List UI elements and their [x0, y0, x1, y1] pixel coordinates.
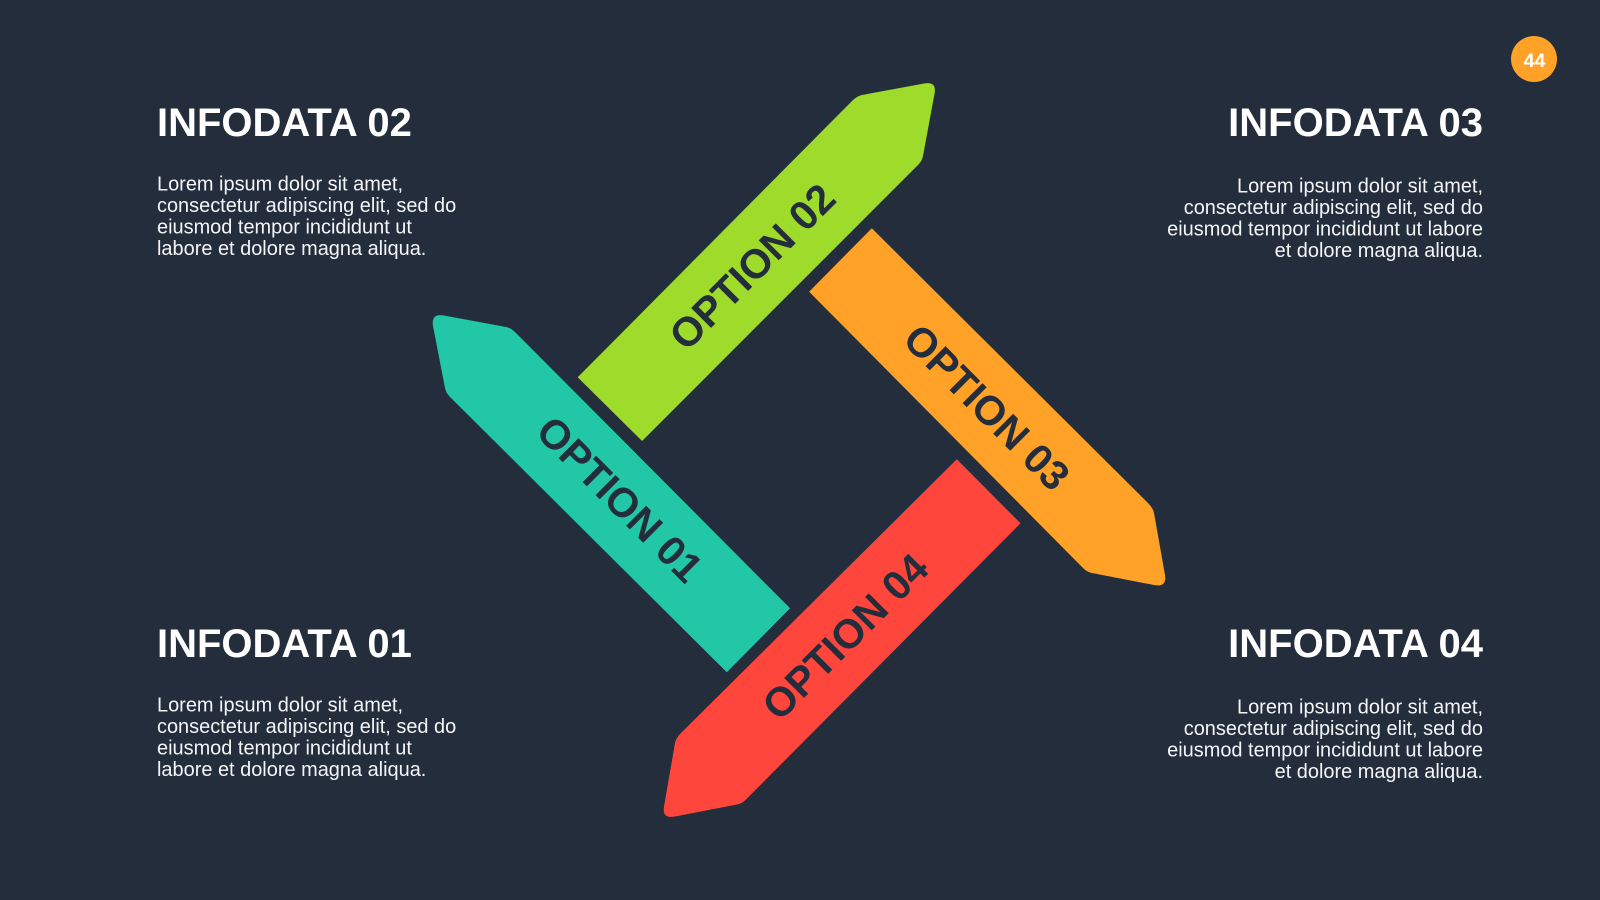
- text block: infodata 03: Lorem ipsum dolor sit amet,: [1237, 176, 1483, 198]
- text block: infodata 01: consectetur adipiscing elit, sed do: [157, 716, 456, 738]
- text block: infodata 01: eiusmod tempor incididunt ut: [157, 738, 412, 760]
- text block: infodata 04: INFODATA 04: [1228, 622, 1484, 666]
- text block: infodata 04: consectetur adipiscing elit, sed do: [1184, 718, 1483, 740]
- text block: infodata 03: eiusmod tempor incididunt ut labore: [1167, 218, 1483, 240]
- text block: infodata 02: labore et dolore magna aliqua.: [157, 238, 426, 260]
- arrow: option 01: [433, 315, 790, 672]
- arrow: option 04: [664, 459, 1020, 817]
- arrow: option 01: OPTION 01: [528, 407, 712, 591]
- text block: infodata 03: et dolore magna aliqua.: [1275, 240, 1483, 262]
- text block: infodata 02: [157, 101, 456, 260]
- text block: infodata 03: consectetur adipiscing elit, sed do: [1184, 197, 1483, 219]
- page number badge: 44: [1524, 50, 1545, 72]
- text block: infodata 02: consectetur adipiscing elit, sed do: [157, 195, 456, 217]
- text block: infodata 04: eiusmod tempor incididunt ut labore: [1167, 740, 1483, 762]
- text block: infodata 03: [1167, 101, 1483, 262]
- text block: infodata 04: [1167, 622, 1484, 783]
- page number badge: [1511, 36, 1557, 82]
- text block: infodata 02: eiusmod tempor incididunt ut: [157, 216, 412, 238]
- arrow: option 02: [578, 83, 935, 441]
- text block: infodata 02: INFODATA 02: [157, 101, 412, 145]
- text block: infodata 01: labore et dolore magna aliqua.: [157, 759, 426, 781]
- text block: infodata 01: [157, 622, 456, 781]
- text block: infodata 04: et dolore magna aliqua.: [1275, 761, 1483, 783]
- arrow: option 03: OPTION 03: [895, 315, 1079, 499]
- text block: infodata 02: Lorem ipsum dolor sit amet,: [157, 174, 403, 196]
- arrow: option 03: [809, 228, 1165, 585]
- text block: infodata 04: Lorem ipsum dolor sit amet,: [1237, 696, 1483, 718]
- arrow: option 02: OPTION 02: [660, 175, 844, 359]
- text block: infodata 01: Lorem ipsum dolor sit amet,: [157, 694, 403, 716]
- text block: infodata 03: INFODATA 03: [1228, 101, 1483, 145]
- text block: infodata 01: INFODATA 01: [157, 622, 412, 666]
- arrow: option 04: OPTION 04: [753, 545, 937, 729]
